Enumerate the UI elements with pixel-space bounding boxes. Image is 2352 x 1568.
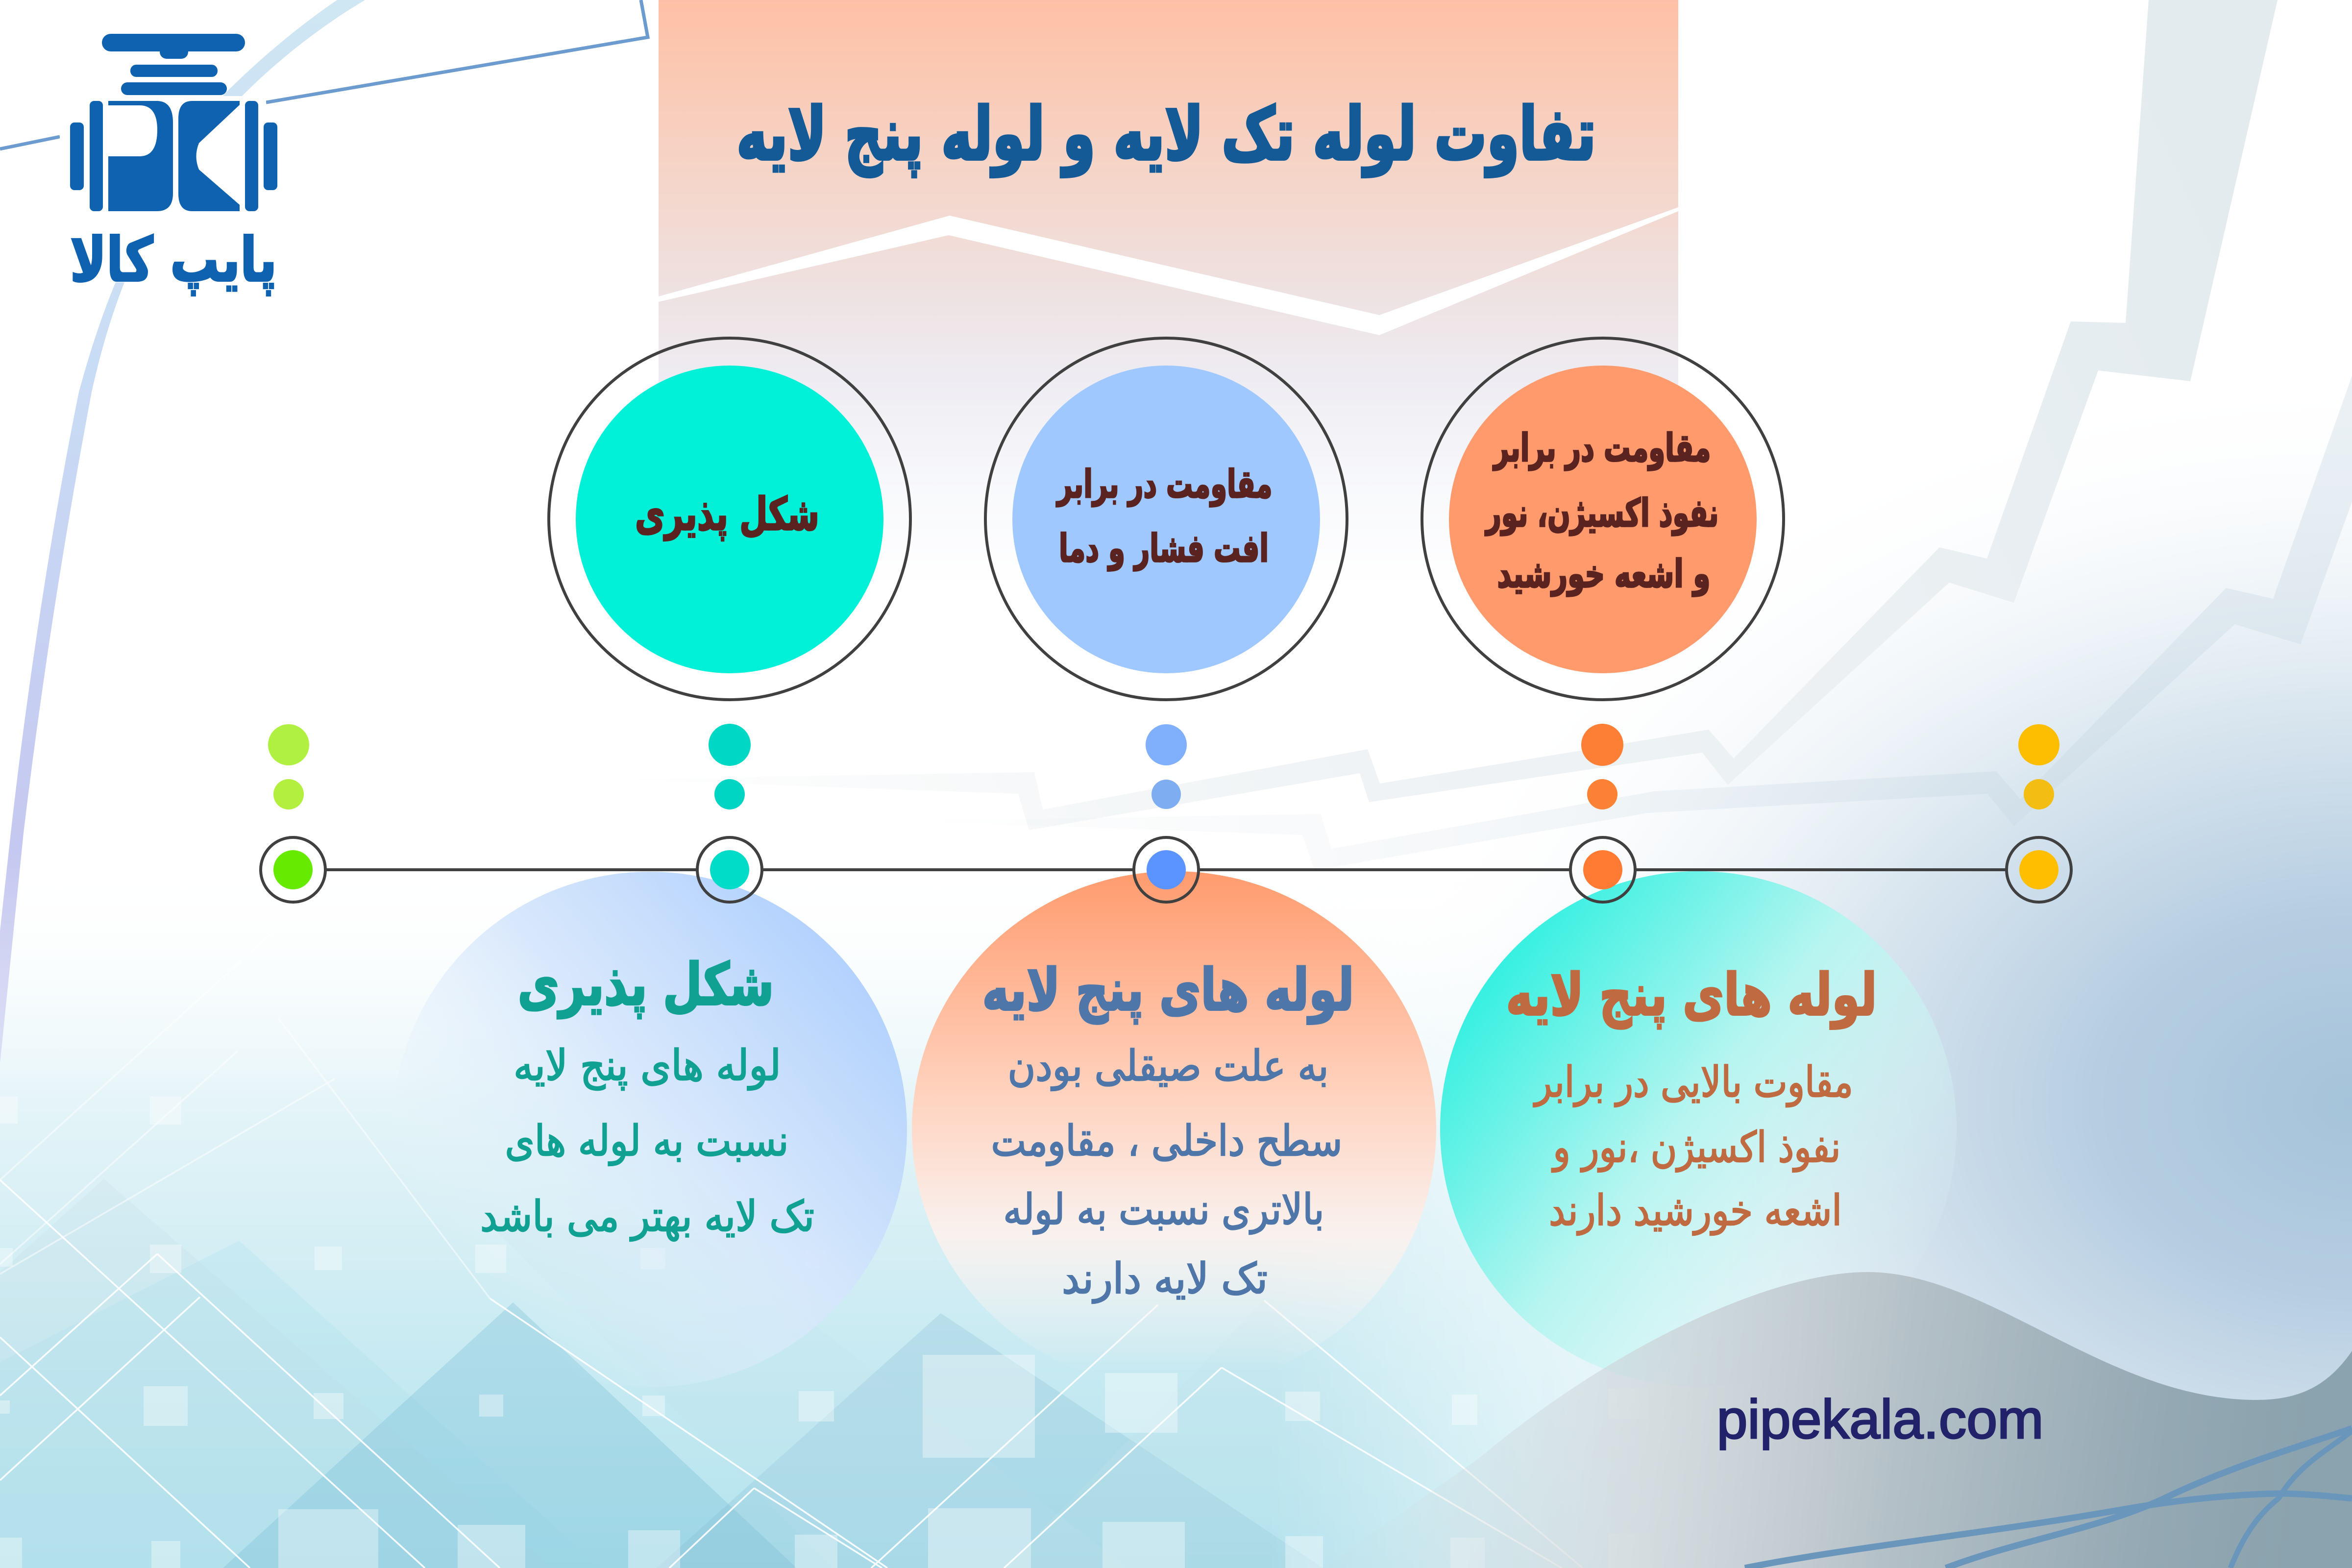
logo: letter K	[178, 101, 240, 211]
white zigzag	[659, 207, 1678, 335]
connector dots 5	[2018, 724, 2059, 809]
background: sweeping arc	[0, 0, 365, 1063]
timeline node 2	[697, 837, 762, 902]
panel: orange detail circle	[912, 871, 1436, 1388]
text block: teal circle	[1506, 961, 1877, 1235]
text block: orange circle: تک لایه دارند	[1062, 1254, 1268, 1303]
wave bottom right	[1323, 1272, 2352, 1568]
timeline node 5	[2007, 837, 2071, 902]
website url: pipekala.com	[1717, 1389, 2043, 1450]
text block: blue circle: لوله های پنج لایه	[514, 1041, 781, 1090]
background: pale squares	[0, 1097, 2294, 1568]
background: rising chart band upper	[604, 0, 2278, 830]
panel: circle oxygen: مقاومت در برابر	[1493, 426, 1711, 470]
logo backing	[60, 96, 266, 282]
logo	[70, 34, 277, 296]
text block: orange circle: لوله های پنج لایه	[982, 956, 1354, 1024]
background: lower-left teal wash	[0, 992, 1621, 1568]
panel: circle oxygen: و اشعه خورشید	[1497, 552, 1710, 596]
logo: letter P	[108, 101, 173, 211]
logo: flange bar	[121, 82, 227, 95]
curved blue lines bottom right	[1745, 1428, 2352, 1568]
background: thin blue line right	[266, 0, 648, 102]
background: thin blue line left	[0, 137, 60, 149]
logo: left end cap	[70, 122, 84, 190]
timeline line	[326, 868, 2006, 871]
text block: orange circle	[982, 956, 1354, 1303]
panel: circle oxygen	[1422, 338, 1784, 700]
text block: blue circle: نسبت به لوله های	[505, 1117, 789, 1166]
text block: blue circle: تک لایه بهتر می باشد	[480, 1192, 814, 1241]
timeline node 4	[1570, 837, 1635, 902]
panel: teal detail circle	[1440, 871, 1957, 1387]
logo: bonnet bar	[130, 65, 218, 77]
text block: orange circle: بالاتری نسبت به لوله	[1004, 1185, 1324, 1234]
timeline node 1	[261, 837, 325, 902]
text block: blue circle	[480, 951, 814, 1241]
logo: valve handle	[102, 34, 245, 59]
text block: teal circle: اشعه خورشید دارند	[1549, 1186, 1842, 1235]
connector dots 4	[1581, 724, 1623, 809]
background: white diagonal lines	[0, 913, 1583, 1568]
text block: orange circle: به علت صیقلی بودن	[1007, 1042, 1329, 1091]
logo: wordmark: پایپ کالا	[70, 225, 277, 296]
timeline node 3	[1134, 837, 1199, 902]
logo: right end cap	[264, 122, 277, 190]
logo: left tall bar	[90, 101, 103, 211]
text block: teal circle: لوله های پنج لایه	[1506, 961, 1877, 1029]
panel: circle pressure: افت فشار و دما	[1059, 527, 1269, 571]
panel: circle flexibility	[549, 338, 910, 700]
title: تفاوت لوله تک لایه و لوله پنج لایه	[736, 92, 1596, 177]
text block: teal circle: نفوذ اکسیژن ،نور و	[1551, 1123, 1840, 1172]
text block: teal circle: مقاوت بالایی در برابر	[1533, 1058, 1853, 1107]
connector dots 1	[268, 724, 309, 809]
panel: circle pressure	[985, 338, 1347, 700]
connector dots 3	[1146, 724, 1187, 809]
connector dots 2	[709, 724, 751, 809]
background: rising chart band lower	[905, 376, 2352, 870]
panel: blue detail circle	[392, 872, 907, 1387]
panel: circle pressure: مقاومت در برابر	[1056, 463, 1272, 507]
logo: right tall bar	[245, 101, 258, 211]
text block: orange circle: سطح داخلی ، مقاومت	[991, 1117, 1343, 1166]
text block: blue circle: شکل پذیری	[517, 951, 774, 1019]
panel: circle flexibility: شکل پذیری	[635, 488, 819, 541]
panel: circle oxygen: نفوذ اکسیژن، نور	[1485, 491, 1719, 536]
title band	[659, 0, 1678, 588]
